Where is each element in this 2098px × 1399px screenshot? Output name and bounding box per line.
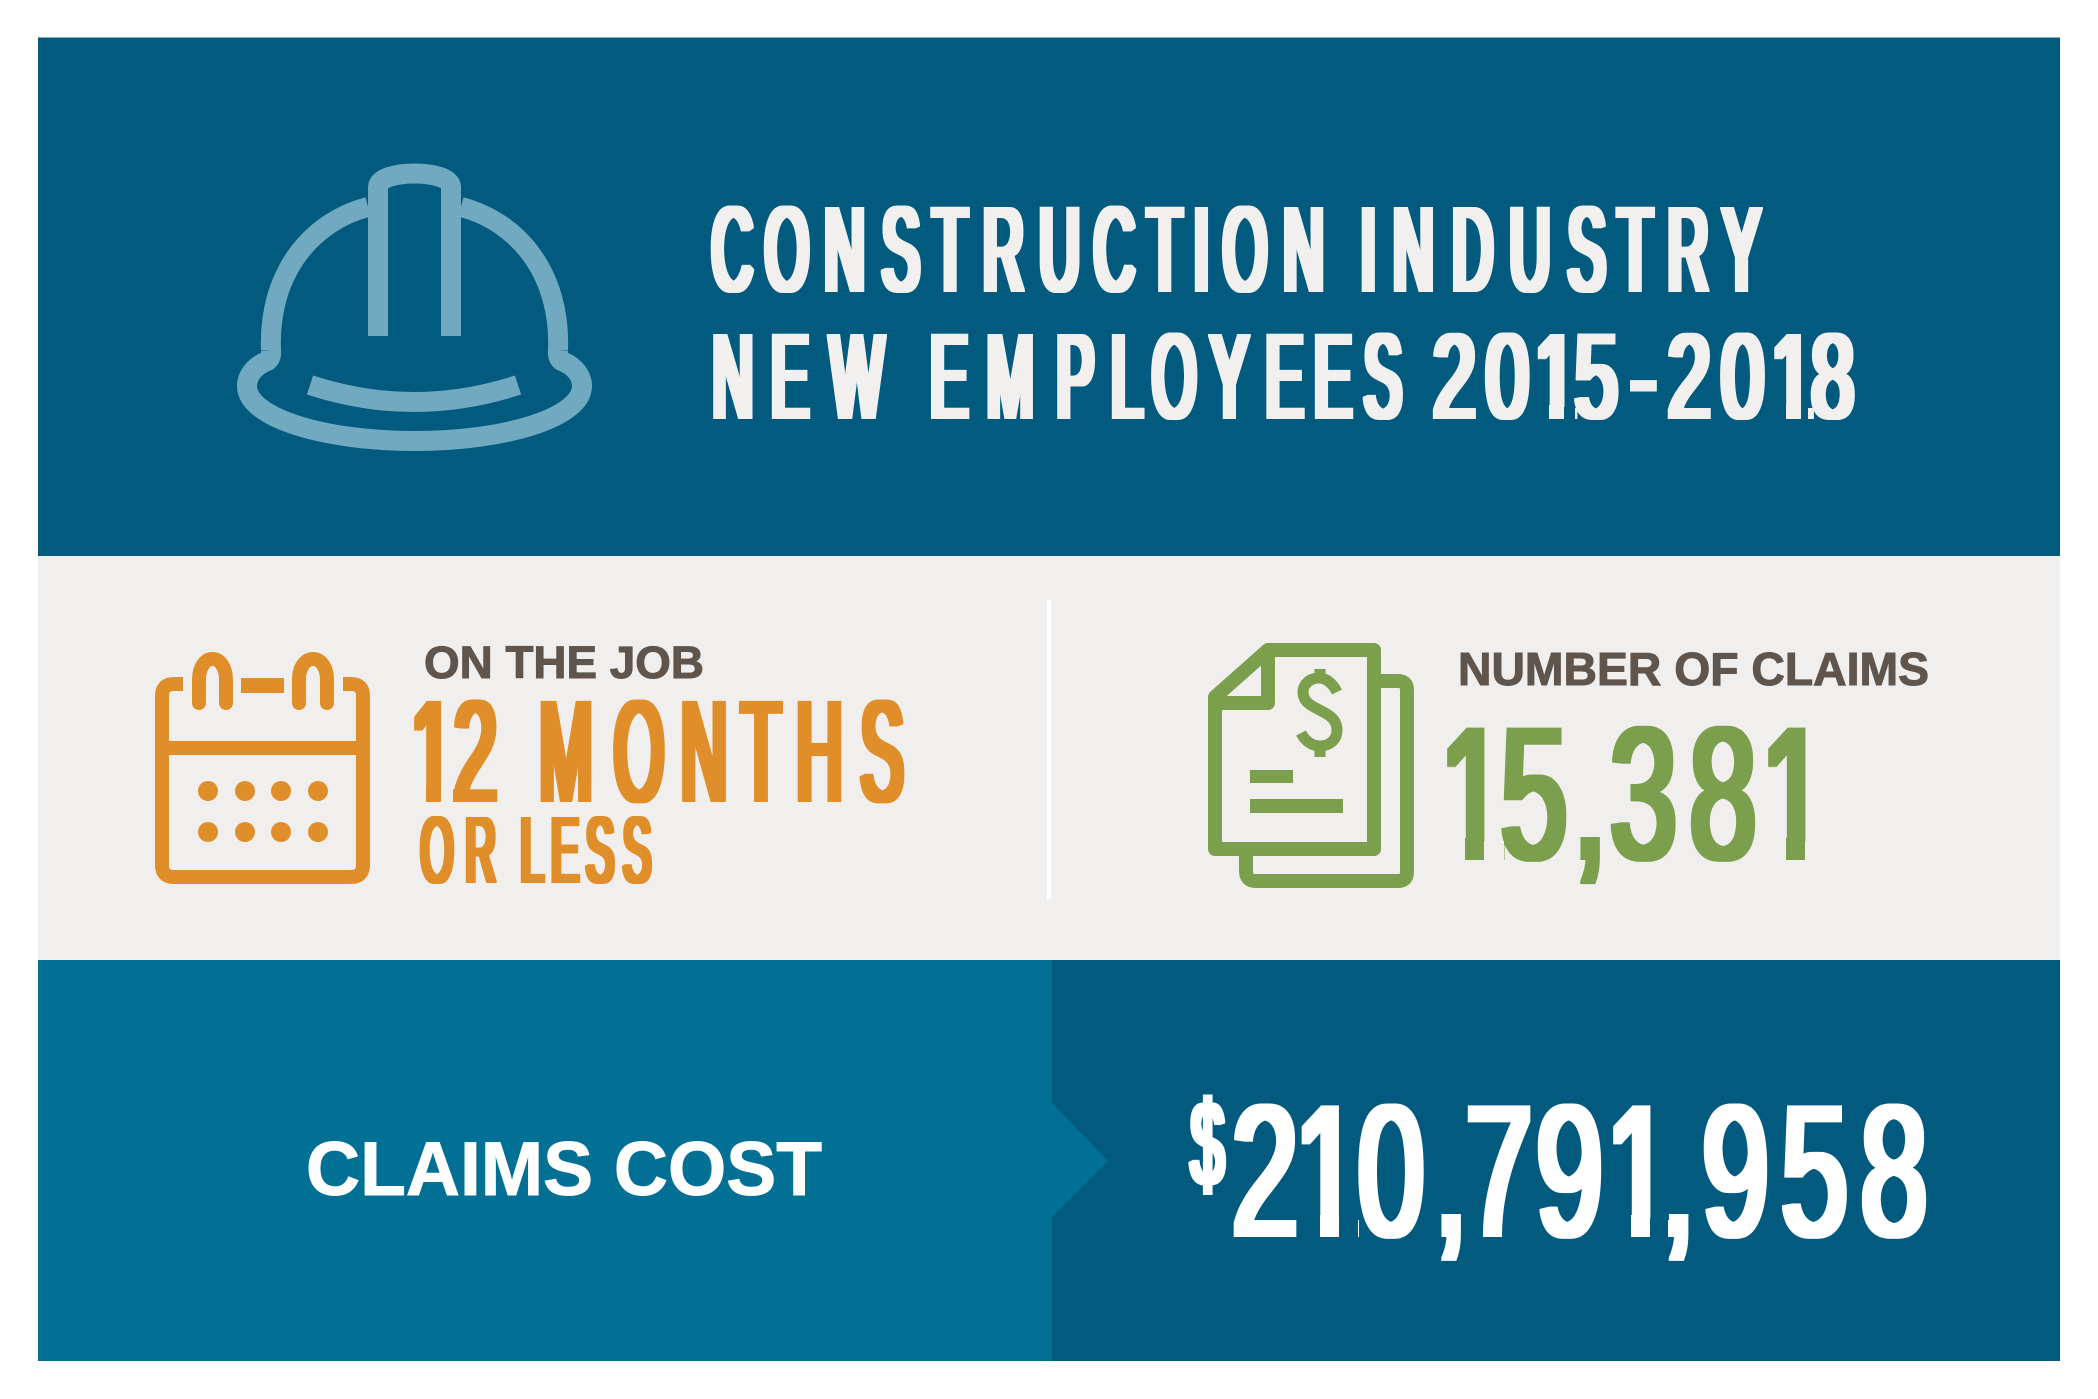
icon: claim documents [1215, 650, 1407, 881]
stat: 12 months: 12 [411, 670, 497, 832]
title: CONSTRUCTION INDUSTRY [712, 182, 1760, 317]
stat: cost amount: 210,791,958 [1232, 1068, 1927, 1276]
label: on the job: ON THE JOB [424, 637, 704, 688]
icon: calendar [162, 659, 363, 877]
icon: hard hat [247, 174, 582, 441]
panel: statistics band [38, 556, 2060, 960]
panel: claims cost [38, 960, 2060, 1361]
stat: dollar sign: $ [1191, 1077, 1224, 1212]
title: NEW EMPLOYEES [713, 309, 1401, 444]
stat: 15,381: 15,381 [1440, 689, 1827, 899]
title: 2015-2018 [1433, 309, 1854, 444]
stat: 12 months: MONTHS [539, 670, 903, 832]
stat: or less: OR LESS [421, 800, 651, 903]
arrow: label panel pointing right [38, 960, 1108, 1361]
panel: header [38, 38, 2060, 556]
title [712, 182, 1854, 444]
label: number of claims: NUMBER OF CLAIMS [1458, 643, 1929, 695]
label: claims cost: CLAIMS COST [306, 1127, 822, 1212]
